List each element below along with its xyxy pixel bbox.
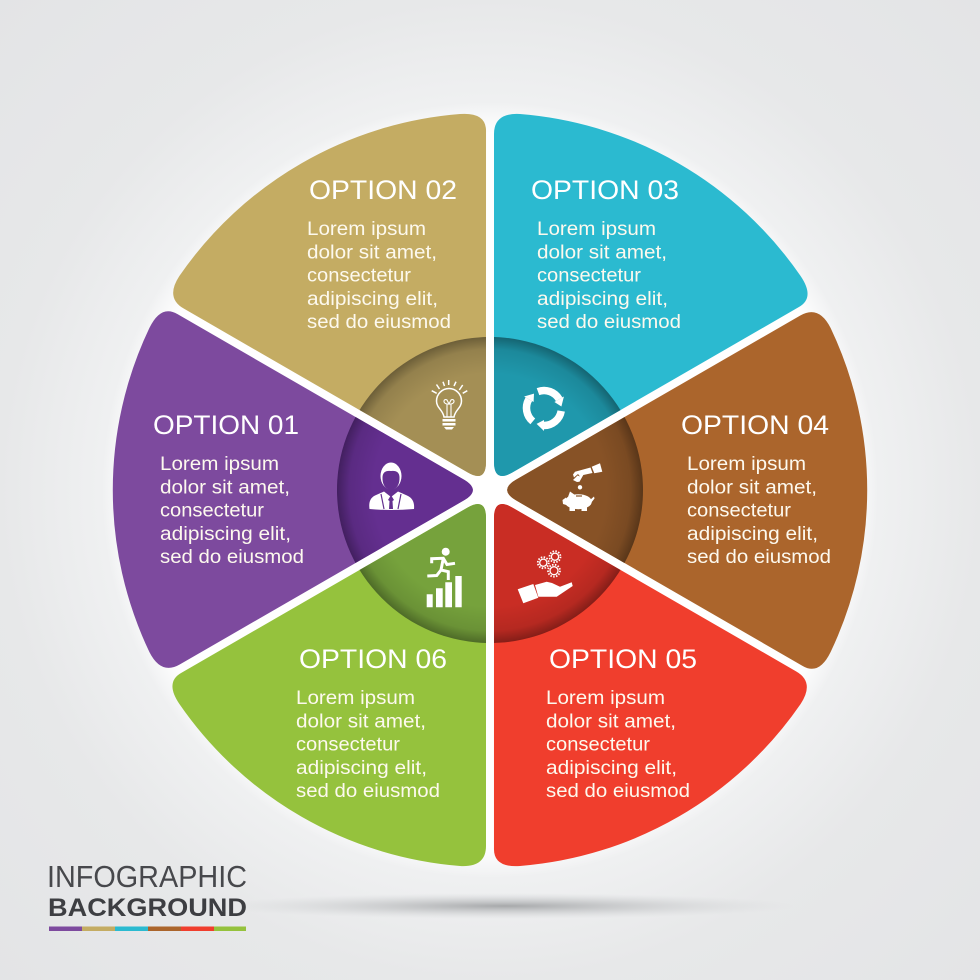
heading: option 01: OPTION 01 [153, 410, 299, 440]
icon: businessman [369, 462, 414, 510]
text block: option 03 [537, 219, 681, 333]
heading: option 05: OPTION 05 [549, 644, 697, 674]
heading: option 02: OPTION 02 [309, 175, 457, 205]
segment: option 04 shape [504, 305, 974, 758]
text block: option 06: consectetur [296, 735, 401, 756]
title: infographic background [47, 859, 247, 931]
text block: option 04: Lorem ipsum [687, 454, 806, 475]
heading: option 06: OPTION 06 [299, 644, 447, 674]
text block: option 03: consectetur [537, 266, 642, 287]
title line: background: BACKGROUND [48, 894, 247, 922]
text block: option 05: sed do eiusmod [546, 781, 690, 802]
text block: option 01: consectetur [160, 501, 265, 522]
text block: option 05: consectetur [546, 735, 651, 756]
panel: option 01 [112, 311, 473, 668]
text block: option 06: Lorem ipsum [296, 688, 415, 709]
text block: option 04: dolor sit amet, [687, 477, 817, 498]
segment: option 06 shape [172, 504, 486, 866]
text block: option 02: sed do eiusmod [307, 312, 451, 333]
text block: option 03: dolor sit amet, [537, 242, 667, 263]
title line: infographic: INFOGRAPHIC [47, 859, 247, 894]
panel: option 02 [173, 114, 486, 476]
inner circle segment: option 06 [360, 504, 486, 643]
heading: option 03: OPTION 03 [531, 175, 679, 205]
icon: hand and piggy bank [562, 463, 602, 511]
heading: option 04: OPTION 04 [681, 410, 829, 440]
text block: option 01: adipiscing elit, [160, 524, 291, 545]
inner circle segment: option 02 [360, 337, 486, 476]
text block: option 03: sed do eiusmod [537, 312, 681, 333]
segment: option 05 shape [343, 500, 814, 953]
text block: option 04: consectetur [687, 501, 792, 522]
inner circle segment: option 04 [507, 417, 643, 563]
text block: option 02: adipiscing elit, [307, 289, 438, 310]
text block: option 02: dolor sit amet, [307, 242, 437, 263]
text block: option 04: sed do eiusmod [687, 547, 831, 568]
text block: option 05: dolor sit amet, [546, 711, 676, 732]
text block: option 06: adipiscing elit, [296, 758, 427, 779]
text block: option 02: consectetur [307, 266, 412, 287]
segment: option 02 shape [166, 27, 637, 480]
text block: option 06: dolor sit amet, [296, 711, 426, 732]
text block: option 03: adipiscing elit, [537, 289, 668, 310]
segment: option 01 shape [6, 222, 476, 675]
text block: option 03: Lorem ipsum [537, 219, 656, 240]
text block: option 05: Lorem ipsum [546, 688, 665, 709]
text block: option 01: Lorem ipsum [160, 454, 279, 475]
panel: option 03 [494, 114, 808, 476]
white halo behind wheel [102, 102, 878, 878]
panel: option 05 [494, 504, 807, 866]
text block: option 01 [160, 454, 304, 568]
text block: option 06: sed do eiusmod [296, 781, 440, 802]
text block: option 05: adipiscing elit, [546, 758, 677, 779]
text block: option 05 [546, 688, 690, 802]
inner circle segment: option 03 [494, 337, 620, 476]
icon: hand with gears [518, 551, 573, 603]
text block: option 01: sed do eiusmod [160, 547, 304, 568]
floor shadow [215, 893, 795, 919]
text block: option 02: Lorem ipsum [307, 219, 426, 240]
colour strip [49, 926, 246, 931]
text block: option 02 [307, 219, 451, 333]
text block: option 06 [296, 688, 440, 802]
panel: option 04 [507, 312, 868, 669]
text block: option 04: adipiscing elit, [687, 524, 818, 545]
segment: option 03 shape [494, 114, 808, 476]
icon: cycle arrows [519, 391, 564, 434]
icon: light bulb [432, 380, 467, 430]
icon: runner on rising bars [427, 548, 462, 607]
inner circle segment: option 01 [337, 417, 473, 563]
text block: option 04 [687, 454, 831, 568]
inner circle segment: option 05 [494, 504, 620, 643]
panel: option 06 [172, 504, 486, 866]
text block: option 01: dolor sit amet, [160, 477, 290, 498]
